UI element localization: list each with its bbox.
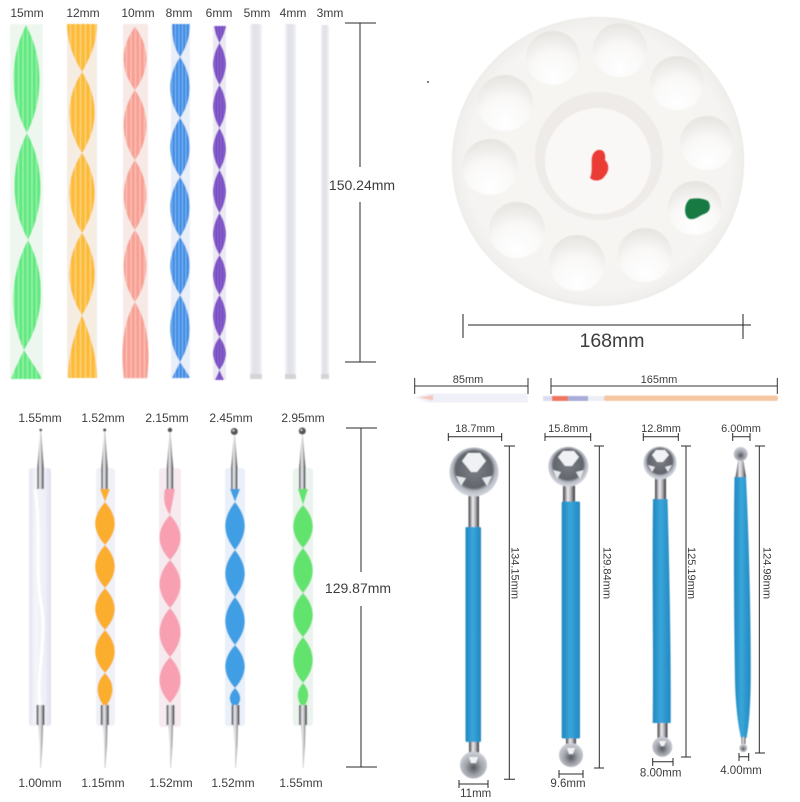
- small speck: [427, 81, 429, 83]
- brush dimension: [551, 374, 777, 394]
- palette width dimension: [463, 314, 751, 352]
- pen bottom tip labels: 1.00mm: [18, 776, 62, 790]
- rod 10mm salmon: [122, 24, 149, 379]
- rod length dimension: [329, 23, 395, 362]
- pencil dimension: [415, 374, 528, 394]
- pen top tip labels: 1.55mm: [18, 411, 62, 425]
- pen top tip labels: [18, 411, 325, 425]
- rod diameter labels: 12mm: [66, 6, 100, 20]
- rod diameter labels: 15mm: [10, 6, 44, 20]
- rod 3mm clear: [321, 25, 329, 379]
- pen bottom tip labels: 1.52mm: [149, 776, 193, 790]
- tool 2 labels: 15.8mm: [548, 423, 588, 435]
- tool 2 labels: [545, 423, 612, 790]
- brush dimension: 165mm: [641, 374, 677, 386]
- rod 4mm clear: [285, 24, 296, 379]
- tool 3 labels: [640, 423, 697, 780]
- panel: dotting pens: [18, 411, 391, 790]
- pen bottom tip labels: [18, 776, 323, 790]
- panel: mandala rods: [10, 6, 395, 380]
- tool 4 labels: 4.00mm: [720, 765, 762, 777]
- tool 1 labels: 134.15mm: [508, 547, 520, 599]
- rod diameter labels: 3mm: [317, 6, 343, 20]
- panel: pencil and brush: [415, 374, 778, 402]
- tool 3 labels: 12.8mm: [641, 423, 681, 435]
- pen 2 amber: [95, 428, 115, 768]
- palette plate: [452, 17, 744, 306]
- red paint blot: [590, 150, 608, 180]
- green paint blot: [685, 198, 710, 219]
- rod 5mm clear: [250, 24, 262, 379]
- pen top tip labels: 2.15mm: [145, 411, 189, 425]
- tool 2: [548, 447, 588, 767]
- tool 1: [450, 448, 498, 778]
- tool 4 labels: 6.00mm: [721, 423, 761, 435]
- rod diameter labels: 6mm: [206, 6, 232, 20]
- rod length dimension: 150.24mm: [329, 177, 395, 193]
- tool 4 labels: 124.98mm: [760, 547, 772, 599]
- pen bottom tip labels: 1.52mm: [211, 776, 255, 790]
- pen top tip labels: 1.52mm: [81, 411, 125, 425]
- white pencil: [415, 394, 528, 402]
- tool 3: [644, 446, 676, 757]
- rod 12mm amber: [67, 24, 97, 378]
- tool 4: [734, 447, 751, 752]
- panel: ball stylus tools: [448, 423, 772, 800]
- rod diameter labels: [10, 6, 343, 20]
- tool 2 labels: 129.84mm: [600, 547, 612, 599]
- rod diameter labels: 8mm: [166, 6, 192, 20]
- panel: paint palette: [427, 17, 751, 352]
- tool 4 labels: [720, 423, 772, 777]
- pen length dimension: [325, 428, 391, 767]
- pencil dimension: 85mm: [453, 374, 483, 386]
- palette width dimension: 168mm: [579, 330, 645, 352]
- rod diameter labels: 5mm: [244, 6, 270, 20]
- rod 15mm green: [10, 24, 43, 379]
- pen 5 green: [293, 428, 313, 768]
- tool 1 labels: 11mm: [460, 788, 491, 800]
- pen top tip labels: 2.45mm: [209, 411, 253, 425]
- pen 4 blue: [225, 428, 245, 768]
- paint brush: [543, 396, 778, 401]
- rod diameter labels: 4mm: [280, 6, 306, 20]
- pen length dimension: 129.87mm: [325, 580, 391, 596]
- rod diameter labels: 10mm: [121, 6, 155, 20]
- pen 3 pink: [159, 428, 181, 768]
- tool 2 labels: 9.6mm: [550, 778, 586, 790]
- pen 1 white: [29, 429, 51, 768]
- palette wells: [462, 23, 734, 291]
- rod 8mm blue: [170, 24, 190, 379]
- pen bottom tip labels: 1.55mm: [279, 776, 323, 790]
- central mixing ring: [535, 92, 663, 220]
- tool 3 labels: 125.19mm: [685, 547, 697, 599]
- pen top tip labels: 2.95mm: [281, 411, 325, 425]
- tool 1 labels: 18.7mm: [455, 423, 495, 435]
- pen bottom tip labels: 1.15mm: [81, 776, 125, 790]
- tool 1 labels: [448, 423, 520, 800]
- tool 3 labels: 8.00mm: [640, 768, 681, 780]
- rod 6mm purple: [213, 26, 226, 380]
